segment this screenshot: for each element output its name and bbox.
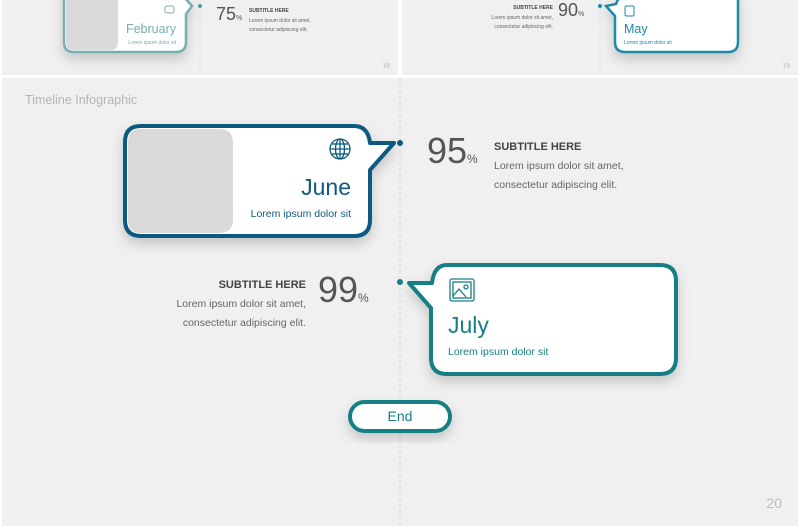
stat: 95%	[427, 130, 624, 191]
stat: 95%: Lorem ipsum dolor sit amet,	[494, 160, 624, 172]
card: May: May	[624, 22, 648, 36]
icon: globe	[330, 139, 350, 159]
panel: slide 19	[402, 0, 798, 75]
stat: 90%: 90%	[558, 0, 584, 20]
card: May	[606, 0, 738, 52]
card: February: February	[126, 22, 177, 36]
stat: 99%: 99%	[318, 269, 369, 310]
heading: Timeline Infographic	[25, 93, 137, 107]
card: June: June	[301, 174, 351, 200]
end pill	[350, 402, 450, 431]
stat: 75%: SUBTITLE HERE	[249, 8, 289, 14]
panel: slide 18: 18	[382, 63, 390, 70]
stat: 99%: Lorem ipsum dolor sit amet,	[176, 298, 306, 310]
icon: image	[450, 279, 474, 301]
stat: 75%: Lorem ipsum dolor sit amet,	[249, 18, 311, 24]
card: July: Lorem ipsum dolor sit	[448, 346, 548, 358]
stat: 95%: SUBTITLE HERE	[494, 141, 581, 153]
stat: 75%: 75%	[216, 4, 242, 24]
stat: 75%: consectetur adipiscing elit.	[249, 27, 308, 33]
card: May: Lorem ipsum dolor sit	[624, 40, 672, 46]
card: June	[125, 126, 394, 236]
stat: 99%	[176, 269, 369, 329]
end pill: End	[388, 408, 412, 424]
stat: 90%: consectetur adipiscing elit.	[494, 24, 553, 30]
stat: 90%: Lorem ipsum dolor sit amet,	[491, 15, 553, 21]
stat: 90%	[491, 0, 584, 30]
panel: slide 18	[2, 0, 398, 75]
card: July	[409, 265, 676, 374]
page number: 20	[766, 495, 782, 511]
card: June: Lorem ipsum dolor sit	[251, 208, 351, 220]
stat: 95%: 95%	[427, 130, 478, 171]
stat: 99%: consectetur adipiscing elit.	[183, 317, 306, 329]
panel: slide 19: 19	[782, 63, 790, 70]
stat: 99%: SUBTITLE HERE	[219, 279, 306, 291]
card: February	[64, 0, 192, 52]
stat: 75%	[216, 4, 311, 33]
stat: 90%: SUBTITLE HERE	[513, 5, 554, 11]
card: February: Lorem ipsum dolor sit	[128, 40, 177, 46]
card: July: July	[448, 312, 489, 338]
stat: 95%: consectetur adipiscing elit.	[494, 179, 617, 191]
